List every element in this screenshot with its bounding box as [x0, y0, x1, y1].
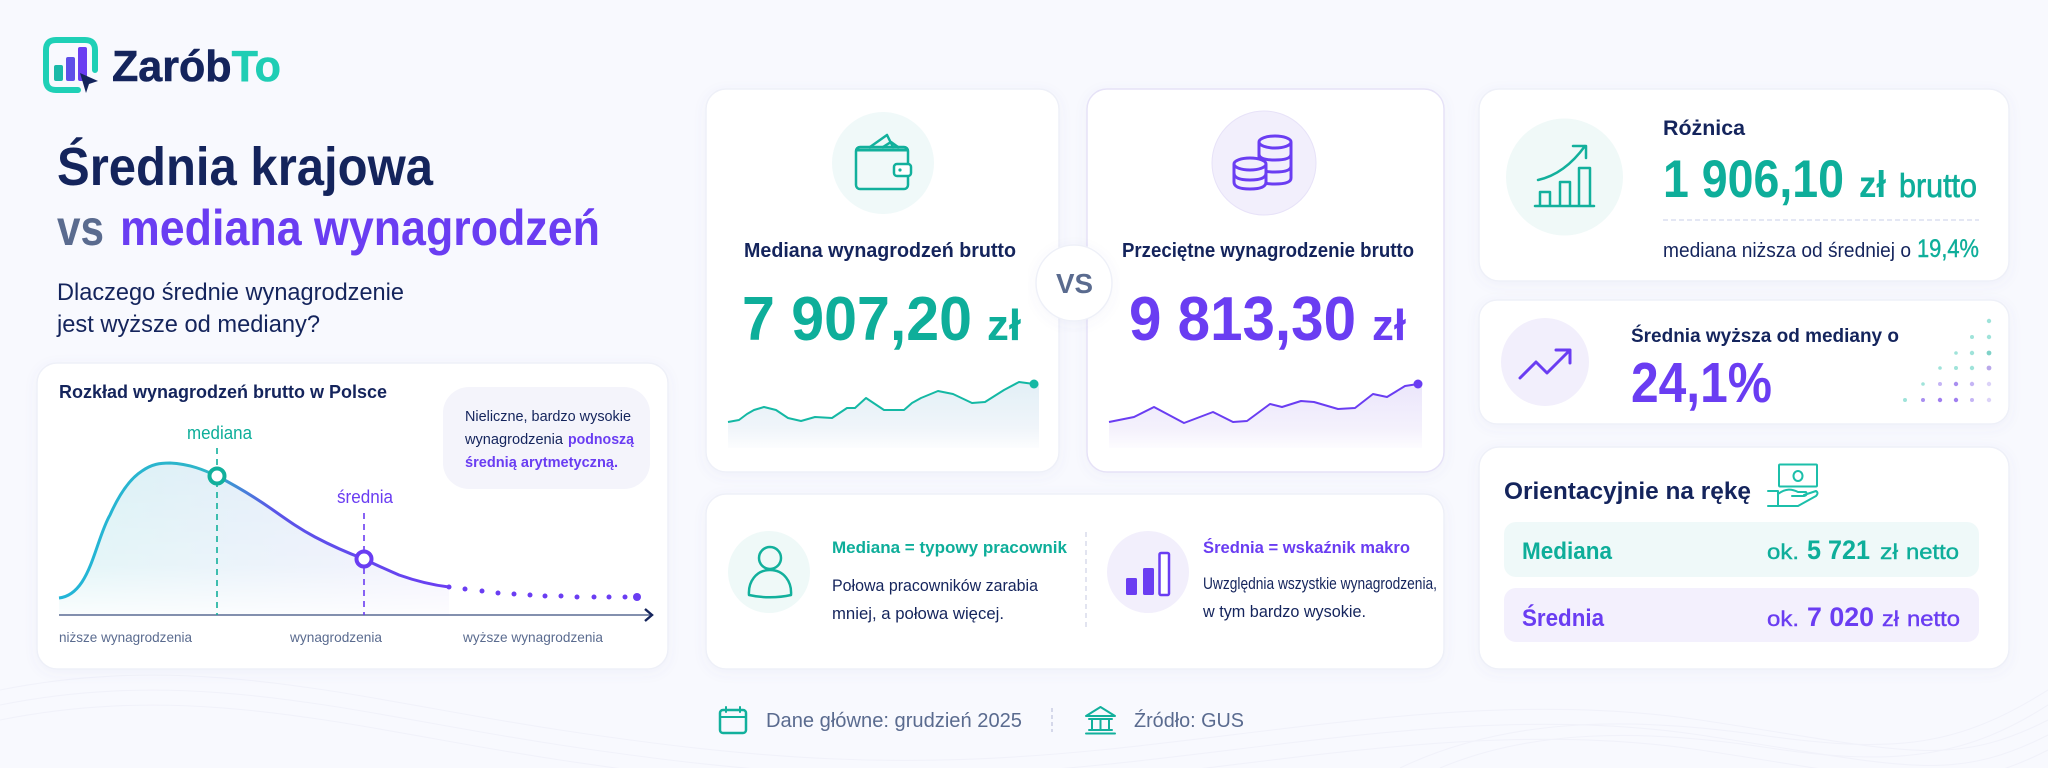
dot pattern — [1903, 319, 1991, 402]
row: average net: 7 020 — [1807, 602, 1874, 632]
subtitle: jest wyższe od mediany? — [56, 311, 320, 338]
sparkline: median — [728, 380, 1039, 448]
mean marker — [337, 487, 394, 615]
text: average meaning: Średnia = wskaźnik makro — [1203, 538, 1410, 557]
median value: zł — [987, 301, 1021, 350]
row: median net: Mediana — [1522, 538, 1613, 565]
text: average meaning: Uwzględnia wszystkie wynagrodzenia, — [1203, 574, 1437, 593]
icon: trend arrow — [1501, 318, 1589, 406]
icon: bars — [1107, 531, 1189, 613]
value — [1663, 150, 1977, 209]
text: average meaning — [1202, 538, 1437, 621]
title: mediana wynagrodzeń — [120, 200, 600, 256]
row: average net: netto — [1907, 608, 1960, 631]
median value: 7 907,20 — [742, 285, 972, 354]
row: average net: ok. — [1767, 608, 1799, 631]
median marker — [187, 423, 253, 615]
average heading: Przeciętne wynagrodzenie brutto — [1122, 240, 1414, 262]
icon: wallet — [832, 112, 934, 214]
text: median meaning: Mediana = typowy pracownik — [832, 538, 1068, 557]
logo: ZarobTo — [46, 40, 281, 93]
panel: salary distribution chart — [37, 363, 668, 669]
axis labels: wynagrodzenia — [289, 629, 382, 645]
title: vs — [57, 200, 104, 256]
subtitle — [56, 279, 404, 338]
badge: VS: VS — [1056, 268, 1093, 299]
row: average net — [1504, 588, 1979, 642]
text: median meaning: Połowa pracowników zarabia — [832, 576, 1039, 595]
axis labels: niższe wynagrodzenia — [59, 629, 192, 645]
text: median meaning: mniej, a połowa więcej. — [832, 604, 1004, 623]
row: median net: zł — [1880, 541, 1898, 564]
axis labels — [59, 629, 603, 645]
row: average net: Średnia — [1522, 604, 1605, 632]
panel: average card — [1087, 89, 1444, 472]
row: median net: netto — [1906, 541, 1959, 564]
median heading: Mediana wynagrodzeń brutto — [744, 240, 1016, 262]
icon: calendar — [720, 707, 746, 733]
row: average net: zł — [1882, 608, 1899, 631]
median marker: mediana — [187, 423, 253, 443]
row: median net: ok. — [1767, 541, 1799, 564]
icon: person — [728, 531, 810, 613]
icon: logo chart with cursor — [46, 40, 98, 93]
chart heading: Rozkład wynagrodzeń brutto w Polsce — [59, 382, 387, 402]
row: median net: 5 721 — [1807, 535, 1870, 565]
note: 19,4% — [1917, 235, 1979, 263]
row: median net — [1504, 522, 1979, 577]
note: mediana niższa od średniej o — [1663, 240, 1911, 262]
sparkline: average — [1109, 380, 1422, 448]
callout: średnią arytmetyczną. — [465, 454, 618, 471]
subtitle: Dlaczego średnie wynagrodzenie — [57, 279, 404, 306]
mean marker: średnia — [337, 487, 394, 507]
panel: difference — [1479, 89, 2009, 281]
label: Średnia wyższa od mediany o — [1631, 325, 1899, 347]
callout — [443, 387, 650, 489]
average value: zł — [1372, 301, 1406, 350]
title: Średnia krajowa — [57, 137, 434, 197]
title — [57, 137, 600, 256]
label: Różnica — [1663, 117, 1745, 140]
panel: net amounts — [1479, 447, 2009, 669]
footer: source — [1086, 707, 1244, 734]
footer: data date: Dane główne: grudzień 2025 — [766, 710, 1022, 732]
value: 1 906,10 — [1663, 150, 1844, 209]
axis with arrow — [59, 609, 652, 621]
value: 24,1% — [1631, 351, 1772, 415]
icon: growth chart — [1506, 118, 1623, 236]
text: median meaning — [832, 538, 1068, 623]
icon: coins — [1212, 111, 1316, 215]
icon: institution — [1086, 707, 1115, 734]
note — [1663, 235, 1979, 263]
panel: median card — [706, 89, 1059, 472]
axis labels: wyższe wynagrodzenia — [462, 629, 603, 645]
average value: 9 813,30 — [1129, 285, 1356, 354]
wordmark: ZaróbTo — [112, 42, 281, 91]
heading: Orientacyjnie na rękę — [1504, 478, 1751, 505]
value: brutto — [1899, 167, 1977, 204]
panel: average higher — [1479, 300, 2009, 424]
callout: Nieliczne, bardzo wysokie — [465, 408, 631, 425]
text: average meaning: w tym bardzo wysokie. — [1202, 602, 1366, 621]
icon: hand with banknote — [1768, 464, 1818, 506]
panel: typical worker vs macro indicator — [706, 494, 1444, 669]
badge: VS — [1036, 245, 1112, 321]
footer: source: Źródło: GUS — [1134, 709, 1244, 732]
distribution curve — [59, 463, 641, 615]
callout: wynagrodzenia — [464, 431, 564, 448]
callout: podnoszą — [568, 431, 635, 448]
value: zł — [1859, 164, 1886, 205]
